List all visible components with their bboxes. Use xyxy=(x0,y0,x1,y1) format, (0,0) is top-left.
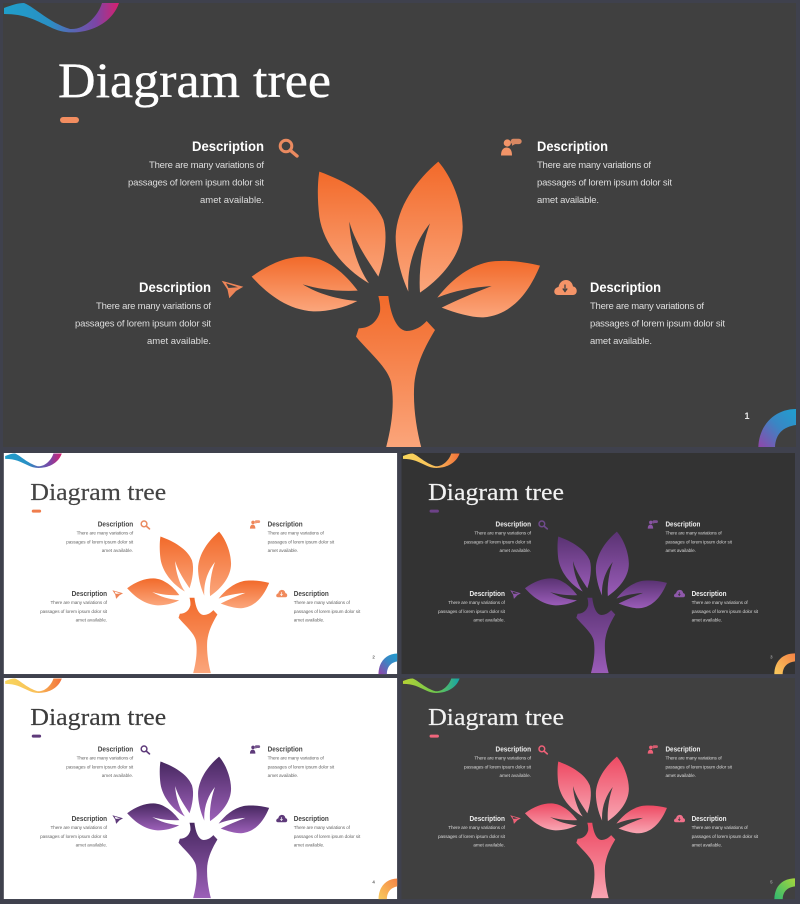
block: bottom left: amet available. xyxy=(76,617,107,622)
block: top left xyxy=(128,138,264,206)
block: top right: There are many variations of xyxy=(268,756,325,761)
block: top left: There are many variations of xyxy=(77,531,134,536)
block: bottom right: passages of lorem ipsum dolor sit xyxy=(294,609,361,614)
block: bottom right: passages of lorem ipsum dolor sit xyxy=(294,834,361,839)
accent pill xyxy=(430,735,439,738)
block: bottom right: passages of lorem ipsum dolor sit xyxy=(692,834,759,839)
block: bottom right: There are many variations of xyxy=(294,825,351,830)
slide 4: small white purple xyxy=(4,678,398,900)
block: bottom right: passages of lorem ipsum dolor sit xyxy=(590,318,725,330)
block: top right: Description xyxy=(665,746,700,753)
block: bottom right: passages of lorem ipsum dolor sit xyxy=(692,609,759,614)
block: top right xyxy=(537,138,672,206)
title: Diagram tree xyxy=(58,52,331,108)
block: bottom right: Description xyxy=(692,591,727,598)
block: bottom right xyxy=(590,279,725,347)
block: top left: Description xyxy=(98,746,133,753)
block: bottom left: amet available. xyxy=(473,842,505,847)
block: bottom right xyxy=(692,816,759,847)
block: top left xyxy=(66,521,134,553)
block: top right: passages of lorem ipsum dolor sit xyxy=(665,539,733,544)
block: top left: passages of lorem ipsum dolor sit xyxy=(464,539,532,544)
block: top left: There are many variations of xyxy=(474,756,532,761)
icon: person with chat bubble xyxy=(250,745,260,754)
block: bottom left: amet available. xyxy=(147,336,211,347)
page number: 3 xyxy=(770,654,773,659)
slide 1: large dark orange xyxy=(3,3,796,449)
block: top left: passages of lorem ipsum dolor sit xyxy=(66,539,134,544)
block: bottom right: amet available. xyxy=(692,617,722,622)
block: top right: Description xyxy=(665,521,700,528)
icon: paper plane xyxy=(112,815,123,824)
block: top right: There are many variations of xyxy=(268,531,325,536)
block: bottom right: There are many variations of xyxy=(692,600,748,605)
block: top left: Description xyxy=(496,521,531,528)
tree diagram xyxy=(127,532,269,673)
block: bottom left: There are many variations of xyxy=(50,825,108,830)
block: bottom left xyxy=(40,591,108,622)
block: bottom left: Description xyxy=(139,279,211,295)
block: bottom right: amet available. xyxy=(692,842,722,847)
accent pill xyxy=(32,735,41,738)
accent pill xyxy=(60,117,79,123)
block: top left: There are many variations of xyxy=(474,531,532,536)
block: top right: amet available. xyxy=(268,548,298,553)
block: top right: passages of lorem ipsum dolor sit xyxy=(537,178,672,188)
title: Diagram tree xyxy=(30,704,166,731)
block: top right: Description xyxy=(268,521,303,528)
block: top right: amet available. xyxy=(665,773,696,778)
block: bottom left xyxy=(438,816,506,847)
block: bottom left xyxy=(40,816,108,847)
block: top left: There are many variations of xyxy=(77,756,134,761)
block: bottom left: There are many variations of xyxy=(448,600,506,605)
block: top right xyxy=(665,521,733,553)
block: top left: passages of lorem ipsum dolor sit xyxy=(128,178,264,188)
icon: paper plane xyxy=(510,815,521,824)
block: top right xyxy=(268,746,335,778)
title: Diagram tree xyxy=(30,479,166,506)
block: bottom left: passages of lorem ipsum dolor sit xyxy=(438,834,506,839)
page number: 1 xyxy=(744,411,750,421)
block: top left: There are many variations of xyxy=(149,160,264,171)
corner arc xyxy=(774,653,795,675)
block: top right xyxy=(665,746,733,778)
block: top left: Description xyxy=(496,746,531,753)
block: bottom left: passages of lorem ipsum dolor sit xyxy=(40,834,108,839)
ribbon: top-left xyxy=(5,453,62,468)
block: top right: Description xyxy=(537,138,608,154)
accent pill xyxy=(430,510,439,513)
ribbon: top-left xyxy=(5,678,62,693)
block: bottom left: passages of lorem ipsum dolor sit xyxy=(40,609,108,614)
block: bottom right xyxy=(294,816,361,847)
block: top right: Description xyxy=(268,746,303,753)
block: bottom right: There are many variations of xyxy=(692,825,748,830)
block: bottom right xyxy=(294,591,361,622)
block: top left: amet available. xyxy=(500,773,531,778)
tree diagram xyxy=(127,757,269,898)
block: bottom right: amet available. xyxy=(294,842,324,847)
title: Diagram tree xyxy=(428,704,564,731)
page number: 5 xyxy=(770,879,773,884)
block: top left: Description xyxy=(192,138,264,154)
block: top right xyxy=(268,521,335,553)
ribbon: top-left xyxy=(4,3,119,32)
block: top left: amet available. xyxy=(102,773,133,778)
block: top left: passages of lorem ipsum dolor sit xyxy=(66,764,134,769)
block: bottom left xyxy=(75,279,211,347)
block: bottom left: Description xyxy=(469,591,505,598)
block: top right: amet available. xyxy=(665,548,696,553)
icon: person with chat bubble xyxy=(250,520,260,529)
block: top left: amet available. xyxy=(102,548,133,553)
icon: paper plane xyxy=(112,590,123,599)
tree diagram xyxy=(252,162,540,449)
block: bottom right: Description xyxy=(294,591,329,598)
block: bottom left: passages of lorem ipsum dolor sit xyxy=(75,318,211,330)
block: bottom right: There are many variations of xyxy=(590,301,704,312)
block: bottom right: There are many variations of xyxy=(294,600,351,605)
block: bottom left: passages of lorem ipsum dolor sit xyxy=(438,609,506,614)
corner arc xyxy=(378,653,398,675)
icon: person with chat bubble xyxy=(648,745,658,754)
icon: magnifier xyxy=(280,140,297,156)
icon: paper plane xyxy=(222,281,243,298)
slide 5: small dark pink xyxy=(401,678,795,900)
block: top left xyxy=(66,746,134,778)
slide 3: small dark purple xyxy=(401,453,795,675)
block: bottom right: Description xyxy=(692,816,727,823)
block: bottom left: Description xyxy=(72,816,107,823)
icon: cloud download xyxy=(674,815,685,822)
title: Diagram tree xyxy=(428,479,564,506)
block: bottom left: There are many variations of xyxy=(96,301,211,312)
page number: 4 xyxy=(372,879,375,884)
block: bottom left: Description xyxy=(72,591,107,598)
block: bottom right xyxy=(692,591,759,622)
icon: paper plane xyxy=(510,590,521,599)
block: bottom left xyxy=(438,591,506,622)
block: bottom right: amet available. xyxy=(590,336,652,347)
icon: cloud download xyxy=(276,815,287,822)
block: top right: There are many variations of xyxy=(665,756,722,761)
block: bottom right: Description xyxy=(590,279,661,295)
tree diagram xyxy=(525,757,667,898)
block: top right: amet available. xyxy=(268,773,298,778)
accent pill xyxy=(32,510,41,513)
block: top right: passages of lorem ipsum dolor sit xyxy=(268,764,335,769)
ribbon: top-left xyxy=(403,453,460,468)
block: bottom left: Description xyxy=(469,816,505,823)
block: top left: amet available. xyxy=(200,195,264,206)
block: top right: amet available. xyxy=(537,195,599,206)
icon: person with chat bubble xyxy=(501,139,522,156)
tree diagram xyxy=(525,532,667,673)
block: top right: passages of lorem ipsum dolor sit xyxy=(268,539,335,544)
block: top right: There are many variations of xyxy=(665,531,722,536)
icon: magnifier xyxy=(539,521,547,529)
block: top right: There are many variations of xyxy=(537,160,651,171)
icon: cloud download xyxy=(674,590,685,597)
block: top left xyxy=(464,521,532,553)
block: top left: amet available. xyxy=(500,548,531,553)
block: top left: passages of lorem ipsum dolor sit xyxy=(464,764,532,769)
slide 2: small white orange xyxy=(4,453,398,675)
icon: person with chat bubble xyxy=(648,520,658,529)
block: bottom right: amet available. xyxy=(294,617,324,622)
corner arc xyxy=(378,878,398,900)
page number: 2 xyxy=(372,654,375,659)
icon: magnifier xyxy=(141,521,149,529)
block: bottom left: There are many variations of xyxy=(50,600,108,605)
icon: cloud download xyxy=(554,280,577,295)
corner arc xyxy=(774,878,795,900)
block: top left: Description xyxy=(98,521,133,528)
corner arc xyxy=(758,409,796,449)
icon: cloud download xyxy=(276,590,287,597)
block: bottom left: amet available. xyxy=(76,842,107,847)
block: bottom left: amet available. xyxy=(473,617,505,622)
block: bottom left: There are many variations of xyxy=(448,825,506,830)
ribbon: top-left xyxy=(403,678,460,693)
block: top right: passages of lorem ipsum dolor sit xyxy=(665,764,733,769)
icon: magnifier xyxy=(539,746,547,754)
block: bottom right: Description xyxy=(294,816,329,823)
icon: magnifier xyxy=(141,746,149,754)
block: top left xyxy=(464,746,532,778)
